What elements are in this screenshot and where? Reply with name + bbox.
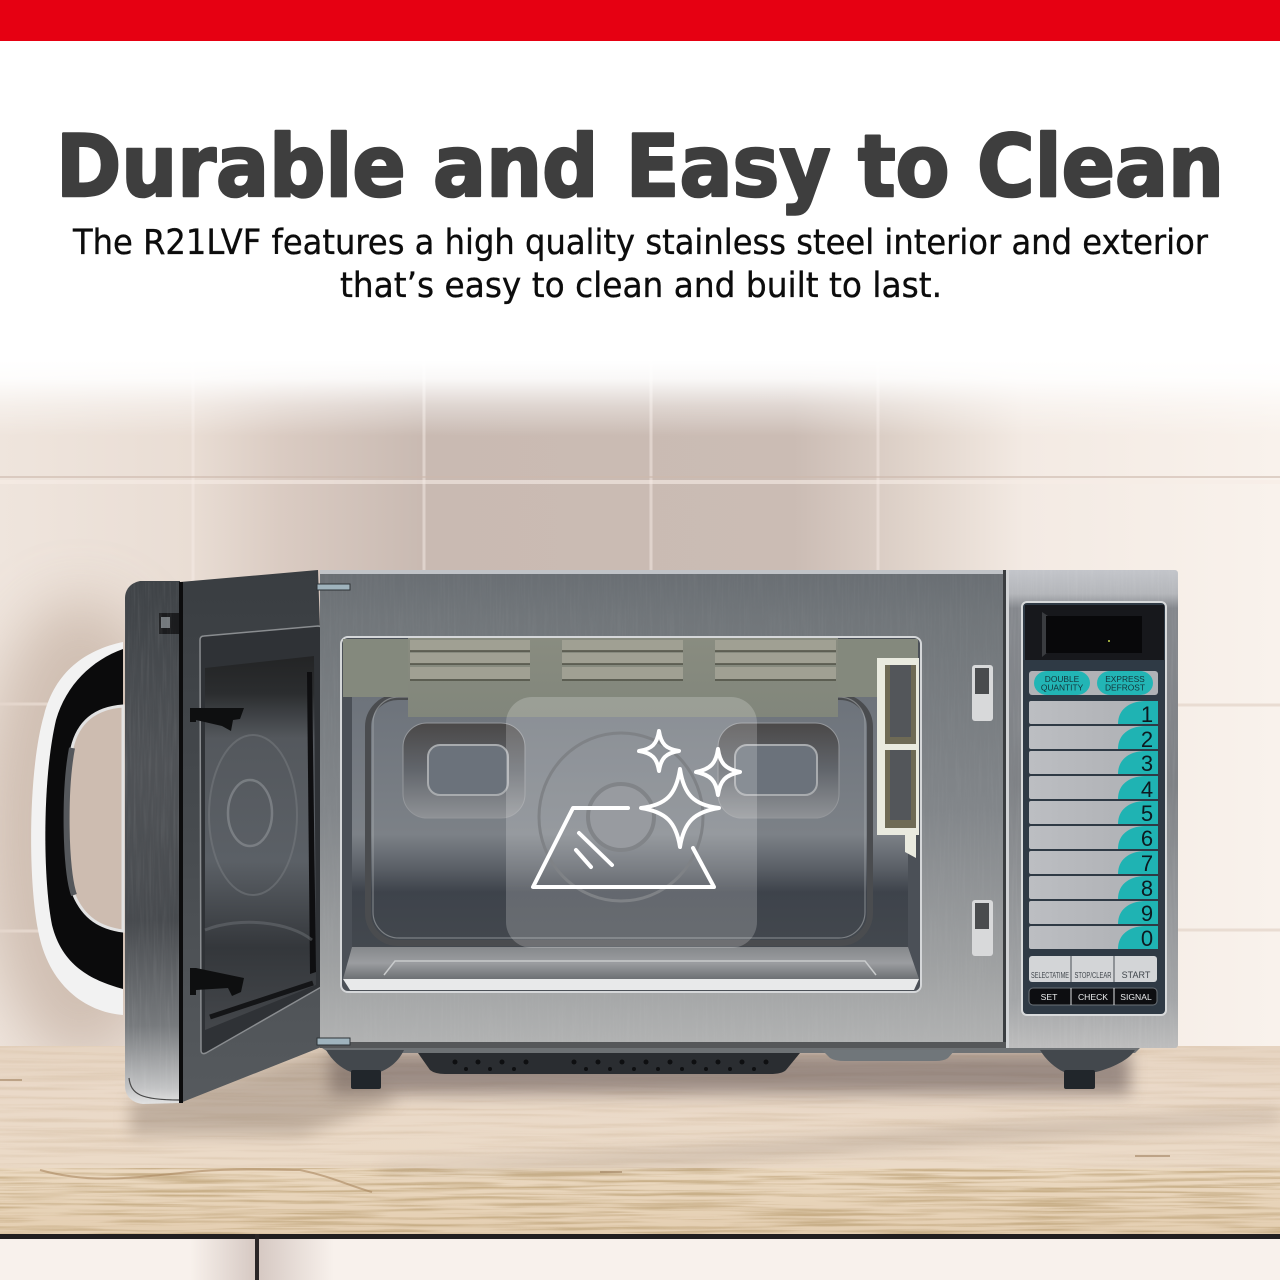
- display window: [1025, 605, 1164, 660]
- shine lines: [576, 833, 612, 867]
- cavity back wall: [352, 697, 908, 947]
- centre disc: [539, 733, 703, 901]
- wooden countertop: [0, 1046, 1280, 1234]
- back wall pressed rim: [368, 697, 870, 943]
- number keypad: 2: [1141, 727, 1153, 752]
- red top banner: [0, 0, 1280, 41]
- cavity floor: [343, 947, 919, 990]
- number keypad: 0: [1141, 926, 1153, 951]
- number keypad: 7: [1141, 851, 1153, 876]
- oven cavity: [341, 637, 921, 992]
- subtitle line 2: that’s easy to clean and built to last.: [340, 266, 942, 306]
- subtitle line 1: The R21LVF features a high quality stainless steel interior and exterior: [72, 223, 1209, 263]
- selection keys: [1029, 956, 1157, 982]
- vent baffle: [408, 638, 838, 717]
- counter shadow: [130, 1050, 1280, 1170]
- number keypad: 4: [1141, 777, 1153, 802]
- right pocket: [718, 723, 839, 818]
- label double quantity: QUANTITY: [1041, 683, 1084, 693]
- black function keys: SET: [1041, 992, 1058, 1002]
- black function keys: SIGNAL: [1120, 992, 1152, 1002]
- right sparkle: [696, 749, 740, 795]
- door inner face: [180, 570, 334, 1103]
- selection keys: START: [1122, 970, 1151, 980]
- small sparkle: [639, 731, 679, 771]
- control panel fascia: [1022, 602, 1166, 1015]
- number keypad: [1029, 701, 1158, 951]
- microwave: [31, 570, 1178, 1104]
- number keypad: 6: [1141, 826, 1153, 851]
- black function keys: [1029, 988, 1157, 1005]
- surface outline: [533, 808, 714, 887]
- door switch slots: [972, 665, 993, 956]
- door edge: [125, 581, 186, 1104]
- black function keys: CHECK: [1078, 992, 1108, 1002]
- number keypad: 8: [1141, 876, 1153, 901]
- hinges: [317, 584, 350, 1045]
- number keypad: 3: [1141, 751, 1153, 776]
- top function keys: [1029, 671, 1158, 695]
- bottom vent: [418, 1053, 800, 1074]
- control panel housing: [1006, 570, 1178, 1048]
- tiled wall: [0, 360, 1280, 1060]
- icon: clean sparkling surface: [533, 731, 740, 887]
- handle: [31, 642, 123, 1015]
- selection keys: SELECTATIME: [1031, 971, 1069, 980]
- door latches: [190, 708, 244, 996]
- label double quantity: DOUBLE: [1045, 674, 1079, 684]
- subtitle: [72, 223, 1209, 306]
- number keypad: 9: [1141, 901, 1153, 926]
- large sparkle: [641, 769, 719, 847]
- white side vent frame: [877, 658, 919, 858]
- label express defrost: DEFROST: [1105, 683, 1145, 693]
- lower cabinet: [0, 1234, 1280, 1280]
- upper side wall right: [838, 639, 918, 697]
- label express defrost: EXPRESS: [1105, 674, 1145, 684]
- underside: [322, 1048, 1140, 1089]
- number keypad: 1: [1141, 702, 1153, 727]
- icon panel: translucent rounded square: [506, 697, 757, 948]
- upper side wall: [343, 639, 408, 697]
- left pocket: [403, 723, 525, 818]
- number keypad: 5: [1141, 801, 1153, 826]
- microwave body: [320, 570, 1006, 1048]
- selection keys: STOP/CLEAR: [1074, 971, 1112, 980]
